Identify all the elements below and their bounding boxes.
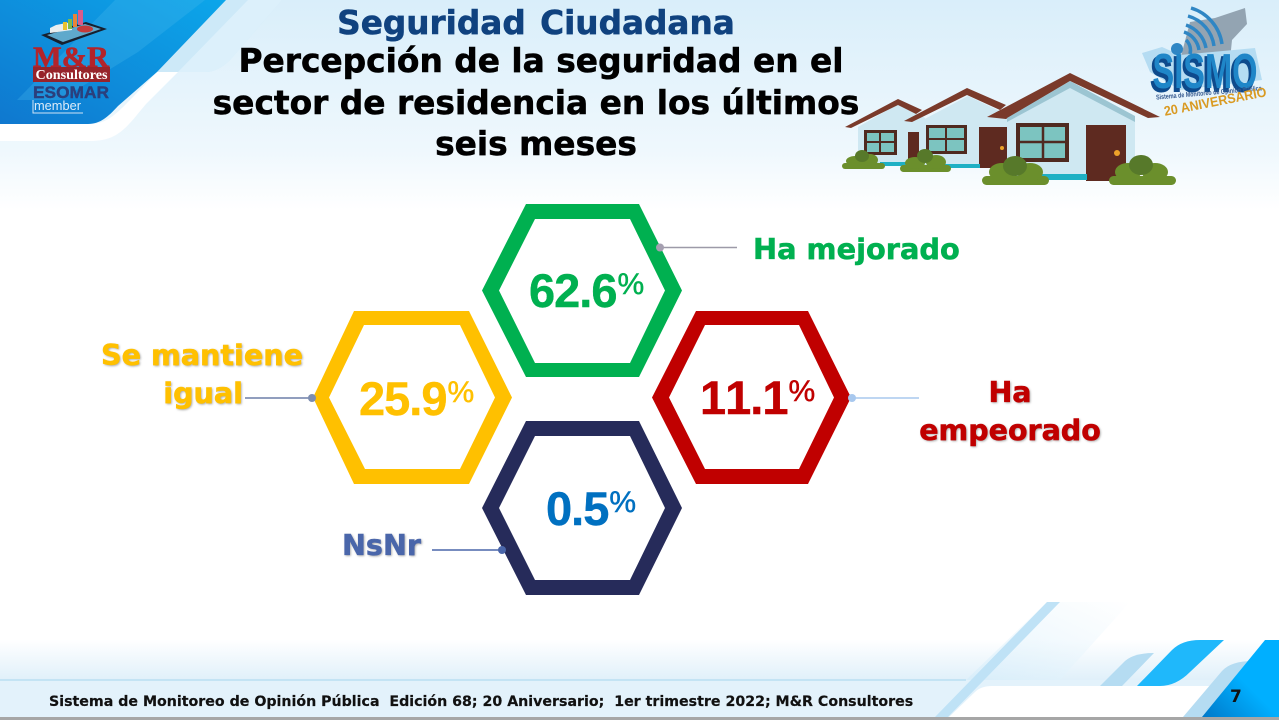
connector: Ha mejorado (656, 244, 737, 252)
footer wash (0, 602, 1279, 718)
label: Ha empeorado: Ha (988, 376, 1032, 409)
value: 25.9%: 25.9% (359, 372, 474, 425)
footer white band (948, 686, 1235, 718)
value: 0.5%: 0.5% (546, 482, 636, 535)
connector: NsNr (432, 546, 506, 554)
hexagon: Ha empeorado (652, 311, 851, 484)
title: Percepción de la seguridad (213, 42, 859, 163)
logo: M&R Consultores ESOMAR: Consultores (36, 67, 108, 82)
connector: Se mantiene igual (245, 394, 316, 402)
connector: Ha empeorado (848, 394, 919, 402)
logo: M&R Consultores ESOMAR: member (34, 98, 82, 113)
logo: M&R Consultores ESOMAR: ESOMAR (33, 83, 109, 102)
logo: M&R Consultores ESOMAR (33, 10, 110, 113)
value: 11.1%: 11.1% (700, 371, 815, 424)
houses illustration (842, 73, 1176, 185)
value: 62.6%: 62.6% (529, 264, 644, 317)
title: Percepción de la seguridad: seis meses (435, 125, 637, 163)
hexagon: Ha mejorado (482, 204, 682, 377)
footer decoration (0, 602, 1279, 717)
title: Seguridad Ciudadana: Seguridad Ciudadana (337, 4, 735, 42)
label: Ha empeorado (919, 376, 1102, 448)
title: Percepción de la seguridad: Percepción de la seguridad en el (238, 42, 844, 80)
header light bands (0, 0, 282, 141)
footer text: Sistema de Monitoreo de Opinión Pública Edición 68; 20 Aniversario; 1er trimestre 2022; M&R Consultores (49, 694, 913, 710)
label: Se mantiene igual: Se mantiene (101, 338, 303, 372)
house 1 (858, 104, 925, 164)
label: Se mantiene igual (101, 338, 304, 412)
house 3 (1007, 84, 1135, 180)
header blue corner (0, 0, 226, 124)
label: Ha empeorado: empeorado (919, 414, 1101, 447)
house 2 (919, 96, 1010, 168)
label: Se mantiene igual: igual (163, 376, 243, 410)
hexagon: NsNr (482, 421, 682, 595)
bushes (842, 149, 1176, 185)
title: Percepción de la seguridad: sector de residencia en los últimos (213, 84, 859, 122)
label: NsNr: NsNr (342, 528, 421, 562)
page number: 7 (1230, 687, 1242, 707)
SISMO logo: 20 ANIVERSARIO (1163, 84, 1268, 119)
label: Ha mejorado: Ha mejorado (753, 232, 960, 266)
hexagon: Se mantiene igual (313, 311, 512, 484)
logo: M&R Consultores ESOMAR: M&R (33, 41, 109, 74)
SISMO logo (1142, 8, 1268, 119)
